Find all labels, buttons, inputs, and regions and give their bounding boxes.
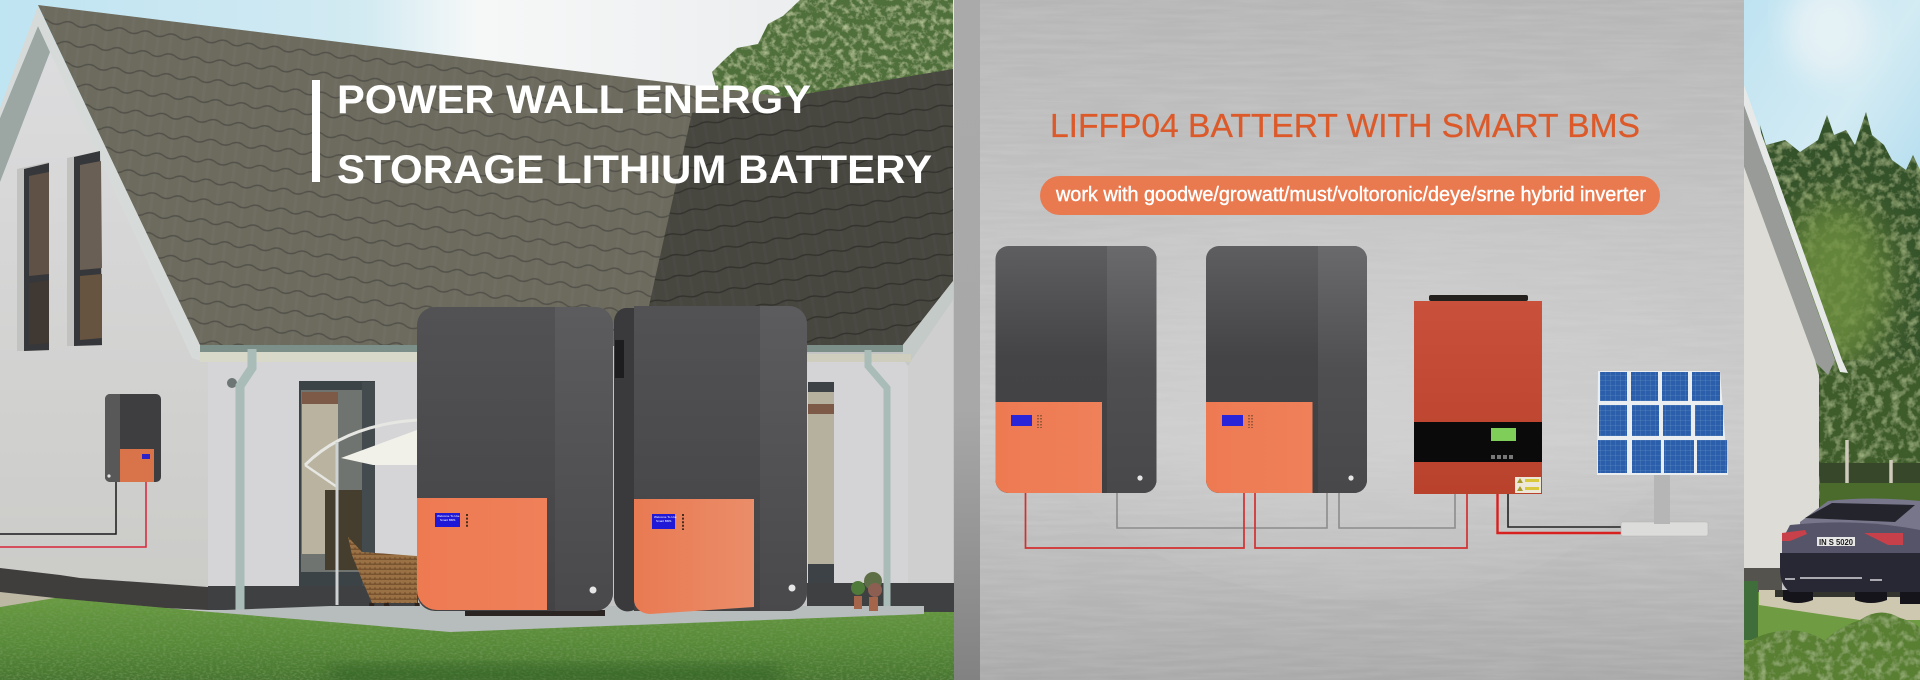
gable wall [0, 52, 208, 592]
cloud [1786, 0, 1874, 80]
patio slab [199, 606, 924, 632]
panel frame [1597, 371, 1728, 475]
LCD screen [1222, 415, 1243, 426]
base of inner wall [208, 586, 418, 610]
pill: inverter compatibility [1040, 176, 1660, 215]
dark fence [1820, 463, 1920, 484]
wall base [0, 568, 208, 610]
control buttons [1491, 455, 1513, 459]
inverter handle [1429, 295, 1528, 301]
LCD screen [435, 513, 460, 527]
wires from small battery [0, 482, 146, 547]
big battery front [417, 307, 613, 611]
stand base [1621, 522, 1708, 536]
heading: battery with smart BMS: LIFFP04 BATTERT WITH SMART BMS [1050, 107, 1640, 144]
panel: house scene left [0, 0, 954, 680]
indicator LEDs [1249, 415, 1252, 428]
hybrid inverter [1414, 295, 1542, 494]
indicator LEDs [682, 514, 684, 530]
panel: system diagram background [954, 0, 1744, 680]
lawn shade [330, 668, 780, 680]
warning label [1515, 477, 1541, 493]
hedge [1820, 483, 1920, 507]
solar cells [1598, 372, 1727, 473]
right wall [807, 358, 908, 590]
green artifact block [1744, 581, 1758, 640]
deciduous tree glow [1780, 200, 1890, 370]
inverter body [1414, 301, 1542, 494]
control band [1414, 422, 1542, 462]
wiring: battery and inverter cables [1026, 493, 1622, 548]
title [337, 78, 932, 192]
power button [1137, 475, 1143, 481]
window right [67, 151, 102, 346]
car roof [1800, 498, 1920, 535]
house fascia [1744, 85, 1848, 373]
LCD screen: Smart BMS [656, 519, 671, 523]
solar panel on stand [1597, 371, 1728, 536]
big battery stand [465, 610, 605, 616]
gable fascia [0, 6, 204, 362]
downpipe left [227, 349, 252, 610]
car trunk [1782, 522, 1920, 565]
exhausts [1785, 578, 1882, 580]
tail lights [1782, 530, 1903, 545]
right eaves gutter [807, 345, 911, 362]
pill: inverter compatibility: work with goodwe/growatt/must/voltoronic/deye/srne hybrid inverter [1055, 184, 1646, 206]
small wall battery [105, 394, 161, 482]
LCD screen [652, 514, 677, 529]
bushes [1744, 612, 1920, 680]
car shadow [1775, 590, 1920, 597]
car wheels [1783, 590, 1920, 604]
potted plants [851, 572, 882, 611]
title: STORAGE LITHIUM BATTERY [337, 148, 932, 192]
house wall [1744, 167, 1819, 568]
window left [17, 162, 49, 351]
driveway [1759, 590, 1920, 620]
car [1775, 498, 1920, 604]
battery module A [996, 246, 1156, 493]
indicator LEDs [466, 514, 468, 528]
stand pole [1654, 474, 1670, 524]
title accent bar [312, 80, 320, 182]
inner wall [208, 358, 418, 588]
LCD screen: Welcome To Use [654, 515, 677, 519]
wall base [1744, 568, 1782, 592]
grass lawn [0, 598, 954, 680]
power button [1348, 475, 1354, 481]
inverter LCD [1491, 428, 1516, 441]
right window [808, 382, 834, 583]
power button [788, 584, 796, 592]
car bumper [1780, 553, 1920, 592]
panel: right scene [1744, 0, 1920, 680]
battery module B [1206, 246, 1367, 493]
right roof in shade [640, 69, 953, 346]
house soffit [1744, 105, 1835, 375]
gable soffit [0, 26, 50, 182]
main roof [38, 5, 787, 346]
downpipe right [868, 350, 887, 612]
big battery angled [614, 306, 807, 614]
eaves gutter [200, 345, 418, 362]
LCD screen: Smart BMS [440, 518, 455, 522]
right gable wall [908, 296, 953, 590]
conifer trees [1760, 112, 1920, 600]
title: POWER WALL ENERGY [337, 78, 811, 122]
sky right [1744, 0, 1920, 260]
tree behind roof [712, 0, 953, 110]
LCD screen: Welcome To Use [437, 514, 460, 518]
indicator LEDs [1038, 415, 1041, 428]
rear window [1805, 503, 1915, 522]
umbrella [305, 420, 417, 605]
lawn [1744, 592, 1920, 680]
wicker chair [348, 537, 418, 617]
stepping path [0, 592, 55, 607]
patio door [299, 381, 375, 586]
right base [807, 583, 954, 612]
LCD screen [1011, 415, 1032, 426]
power button [590, 586, 596, 594]
number plate: IN S 5020 [1819, 538, 1854, 547]
sky with cloud [0, 0, 954, 200]
lower tree band [1820, 360, 1920, 465]
right fascia [902, 281, 953, 366]
tree trunks [1847, 440, 1891, 483]
